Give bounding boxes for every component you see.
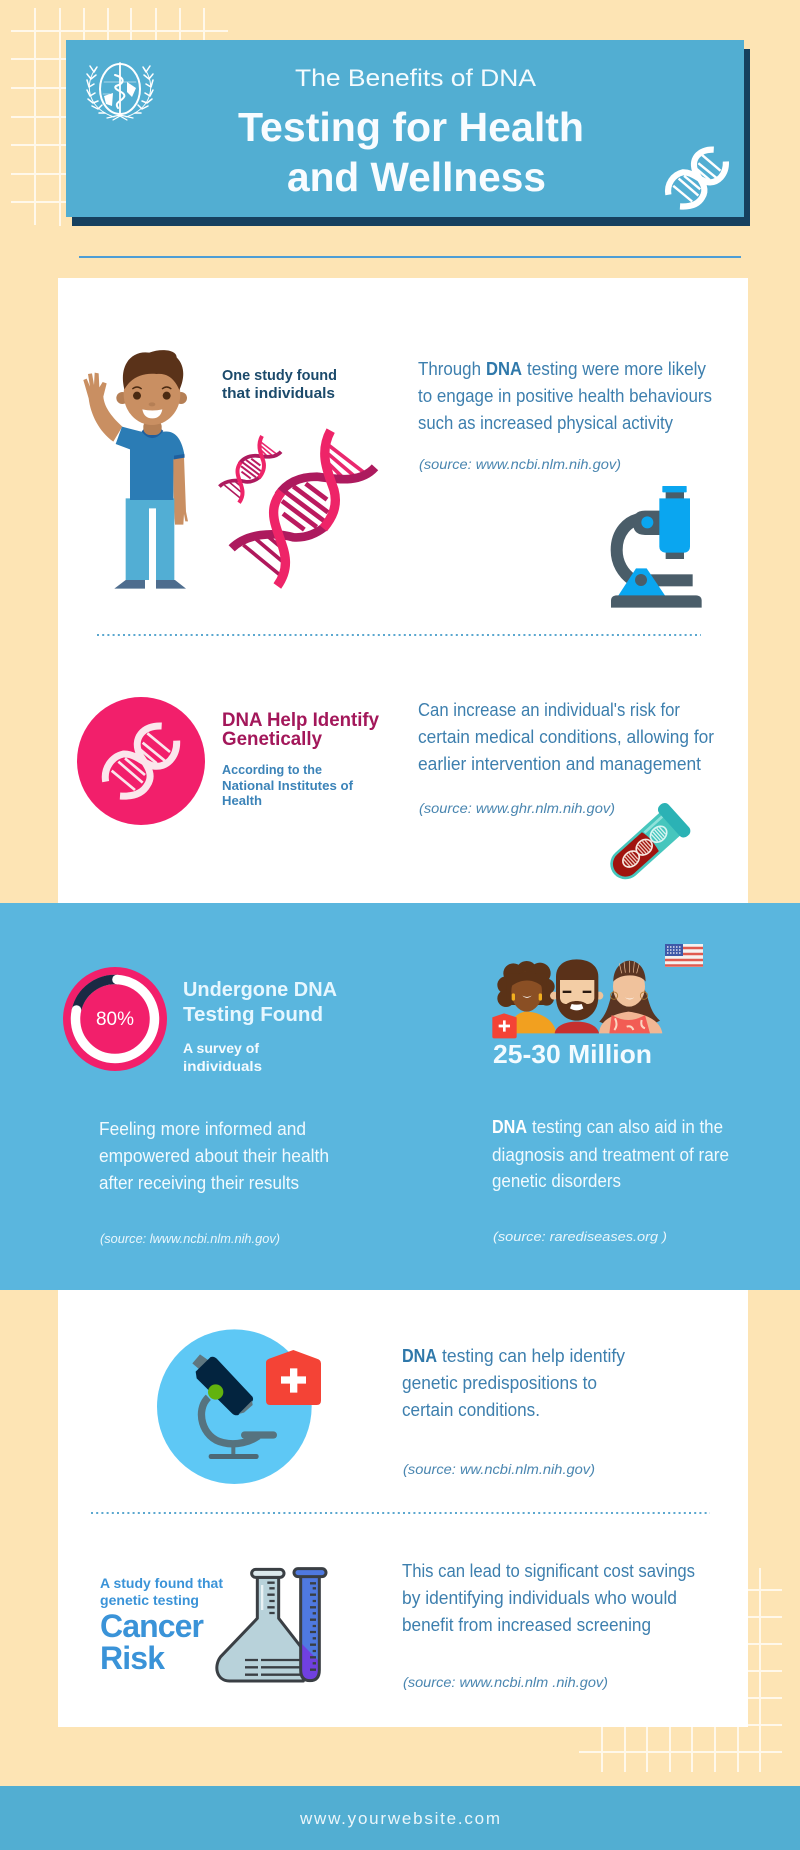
left woman — [497, 961, 556, 1033]
icon: US flag — [665, 944, 703, 967]
text: undergone DNA testing — [183, 979, 337, 1074]
icon: three people — [492, 959, 662, 1038]
text: one study found — [222, 367, 337, 402]
text: one study found: One study found — [222, 367, 337, 384]
text: rare genetic disorders: (source: rarediseases.org ) — [493, 1229, 667, 1244]
title: The Benefits of DNA — [295, 65, 536, 92]
icon: microscope in blue circle — [157, 1329, 321, 1484]
panel: lower white panel — [58, 1290, 748, 1727]
test tube — [294, 1569, 326, 1681]
text: positive health behaviours: such as increased physical activity — [418, 413, 673, 433]
red medical badge — [492, 1013, 517, 1038]
text: rare genetic disorders — [492, 1117, 729, 1244]
text: one study found: that individuals — [222, 385, 335, 402]
text: positive health behaviours — [418, 359, 712, 472]
text: feeling more informed: empowered about their health — [99, 1146, 329, 1166]
small helix — [219, 436, 281, 503]
title — [238, 65, 584, 200]
illustration: pink DNA helices — [219, 431, 375, 586]
website url: www.yourwebsite.com — [299, 1809, 500, 1828]
icon: flask and test tube — [217, 1569, 326, 1681]
text: rare genetic disorders: DNA — [492, 1117, 527, 1137]
text: DNA help identify: Health — [222, 793, 262, 808]
icon: pink DNA circle — [77, 697, 205, 825]
text: feeling more informed: Feeling more informed and — [99, 1119, 306, 1139]
text: undergone DNA testing: A survey of — [183, 1040, 259, 1056]
title: Testing for Health — [238, 104, 584, 150]
text: positive health behaviours: DNA — [486, 359, 522, 379]
text: positive health behaviours: Through — [418, 359, 481, 379]
illustration: waving boy — [83, 350, 188, 589]
text: undergone DNA testing: individuals — [183, 1058, 262, 1074]
text: cost savings: (source: www.ncbi.nlm .nih.gov) — [403, 1674, 608, 1690]
text: genetic predispositions: genetic predispositions to — [402, 1373, 597, 1393]
stat: 25-30 million: 25-30 Million — [493, 1039, 652, 1069]
text: rare genetic disorders: testing can also aid in the — [532, 1117, 723, 1137]
text: undergone DNA testing: Testing Found — [183, 1004, 323, 1026]
text: risk for medical conditions — [418, 700, 714, 816]
text: cost savings — [402, 1561, 695, 1690]
text: feeling more informed: (source: lwww.ncbi.nlm.nih.gov) — [100, 1231, 280, 1246]
text: cancer risk: Risk — [100, 1640, 165, 1676]
text: cost savings: by identifying individuals who would — [402, 1588, 677, 1608]
chart: 80 percent donut: 80% — [96, 1009, 134, 1030]
icon: WHO emblem — [87, 63, 153, 120]
title: and Wellness — [287, 154, 546, 200]
text: genetic predispositions: DNA — [402, 1346, 437, 1366]
text: genetic predispositions — [402, 1346, 625, 1477]
text: risk for medical conditions: (source: www.ghr.nlm.nih.gov) — [419, 800, 615, 816]
text: cancer risk: Cancer — [100, 1608, 204, 1644]
text: positive health behaviours: (source: www.ncbi.nlm.nih.gov) — [419, 456, 621, 472]
text: undergone DNA testing: Undergone DNA — [183, 979, 337, 1001]
text: cancer risk: genetic testing — [100, 1592, 199, 1608]
text: DNA help identify: According to the — [222, 762, 322, 777]
text: risk for medical conditions: Can increase an individual's risk for — [418, 700, 680, 720]
text: genetic predispositions: certain conditions. — [402, 1400, 540, 1420]
large helix — [232, 431, 375, 586]
middle man — [550, 959, 603, 1033]
text: risk for medical conditions: earlier intervention and management — [418, 754, 701, 774]
icon: microscope — [611, 486, 702, 608]
text: positive health behaviours: to engage in positive health behaviours — [418, 386, 712, 406]
text: rare genetic disorders: diagnosis and treatment of rare — [492, 1145, 729, 1165]
flask — [217, 1569, 303, 1681]
text: DNA help identify: DNA Help Identify — [222, 710, 379, 731]
red shield badge — [266, 1350, 321, 1405]
icon: white DNA — [668, 150, 726, 206]
panel: blue statistics band — [0, 903, 800, 1290]
header banner — [66, 40, 750, 226]
right woman — [599, 961, 662, 1033]
icon: test tube — [600, 801, 693, 890]
text: rare genetic disorders: genetic disorders — [492, 1171, 621, 1191]
text: feeling more informed — [99, 1119, 329, 1246]
text: DNA help identify: Genetically — [222, 729, 322, 750]
panel: top white panel — [58, 278, 748, 904]
chart: 80 percent donut — [63, 967, 167, 1071]
footer band — [0, 1786, 800, 1850]
text: cost savings: This can lead to significant cost savings — [402, 1561, 695, 1581]
text: genetic predispositions: testing can help identify — [442, 1346, 625, 1366]
header panel — [66, 40, 744, 217]
text: positive health behaviours: testing were more likely — [527, 359, 706, 379]
text: DNA help identify: National Institutes of — [222, 778, 354, 793]
text: cancer risk — [100, 1575, 223, 1676]
text: cancer risk: A study found that — [100, 1575, 223, 1591]
text: DNA help identify — [222, 710, 379, 808]
text: feeling more informed: after receiving their results — [99, 1173, 299, 1193]
text: genetic predispositions: (source: ww.ncbi.nlm.nih.gov) — [403, 1461, 595, 1477]
text: cost savings: benefit from increased screening — [402, 1615, 651, 1635]
text: risk for medical conditions: certain medical conditions, allowing for — [418, 727, 714, 747]
header shadow — [72, 49, 750, 226]
